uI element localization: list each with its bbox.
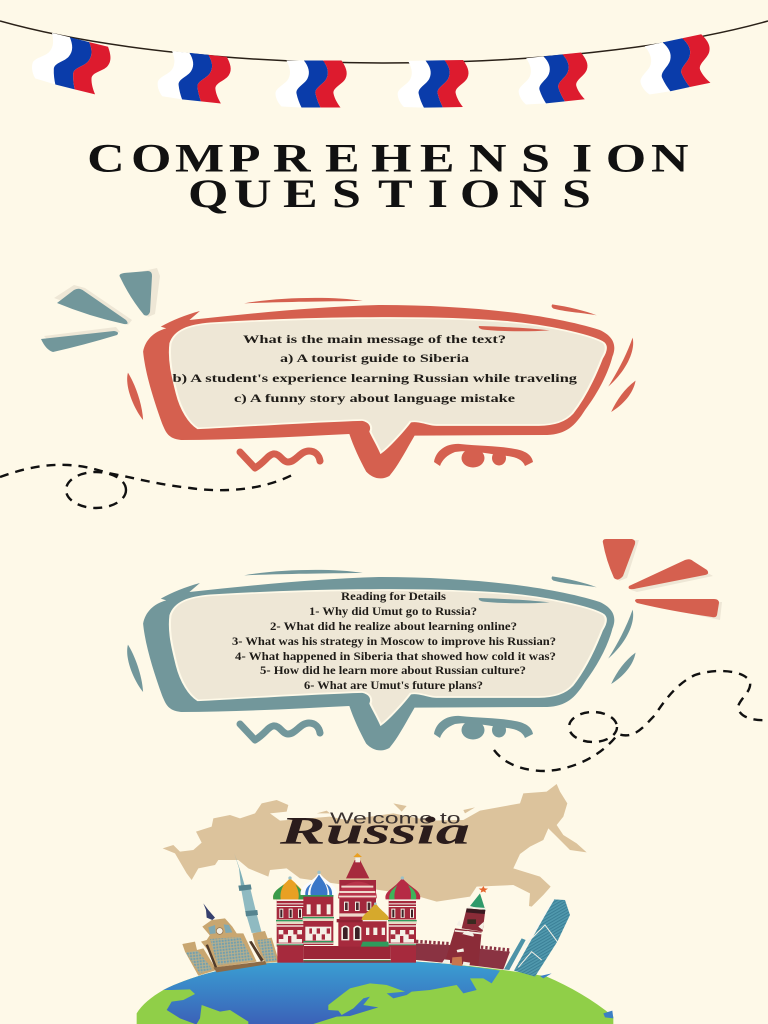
globe [137,961,613,1024]
bubble outline [127,298,636,478]
flag 4 [397,60,469,108]
title: COMPREHENSION [87,137,689,181]
wall [416,943,510,969]
detail questions text: 3- What was his strategy in Moscow to improve his Russian? [232,636,556,648]
base [213,961,267,972]
university building [182,903,279,976]
detail questions text: 2- What did he realize about learning online? [270,621,517,633]
Saint Basil's Cathedral [273,853,420,963]
blue dome tower [303,895,333,945]
detail questions text: Reading for Details [341,591,447,603]
flag bunting [29,30,717,108]
left tower [276,899,305,947]
wings [182,942,217,976]
cathedral base [277,946,303,963]
squiggle left [240,723,320,740]
question text: c) A funny story about language mistake [234,393,515,405]
question text [172,334,577,405]
ocean [163,961,500,1024]
welcome text: Welcome to [330,810,461,827]
russia text: Russia [278,808,470,852]
right tower [388,899,417,947]
Kremlin wall and tower [416,886,510,969]
Spassky tower [445,928,482,966]
clock tower [202,918,237,936]
dashed loop path right [494,671,768,771]
Moscow City skyscrapers [504,899,570,977]
icon: teal burst rays [41,268,160,352]
icon: red burst rays [603,539,722,620]
swirl right [434,716,533,740]
yellow dome tower [363,920,387,942]
detail questions text: 6- What are Umut's future plans? [304,680,483,692]
bunting string [0,21,768,63]
squiggle left [240,451,320,468]
flag 5 [515,52,591,106]
detail questions text: 1- Why did Umut go to Russia? [309,606,477,618]
title: QUESTIONS [188,173,591,216]
dashed loop path left [0,465,296,508]
central block [201,933,257,968]
map of Russia [163,784,587,907]
center tent tower [338,920,363,947]
swirl right [434,444,533,468]
detail questions text: 4- What happened in Siberia that showed how cold it was? [235,651,556,663]
detail questions text [232,591,556,692]
flag 6 [633,33,717,97]
panel: main message speech bubble [127,298,636,478]
flag 2 [156,50,232,104]
title [87,137,689,216]
bubble outline [127,570,636,750]
detail questions text: 5- How did he learn more about Russian culture? [260,665,526,677]
question text: b) A student's experience learning Russian while traveling [172,373,577,385]
panel: reading for details speech bubble [127,570,636,750]
Ostankino tower [234,853,262,933]
question text: a) A tourist guide to Siberia [280,353,469,365]
flag 3 [276,60,347,108]
illustration: Welcome to Russia [137,784,613,1024]
flag 1 [29,30,113,96]
small seas [540,973,613,1018]
question text: What is the main message of the text? [243,334,506,346]
